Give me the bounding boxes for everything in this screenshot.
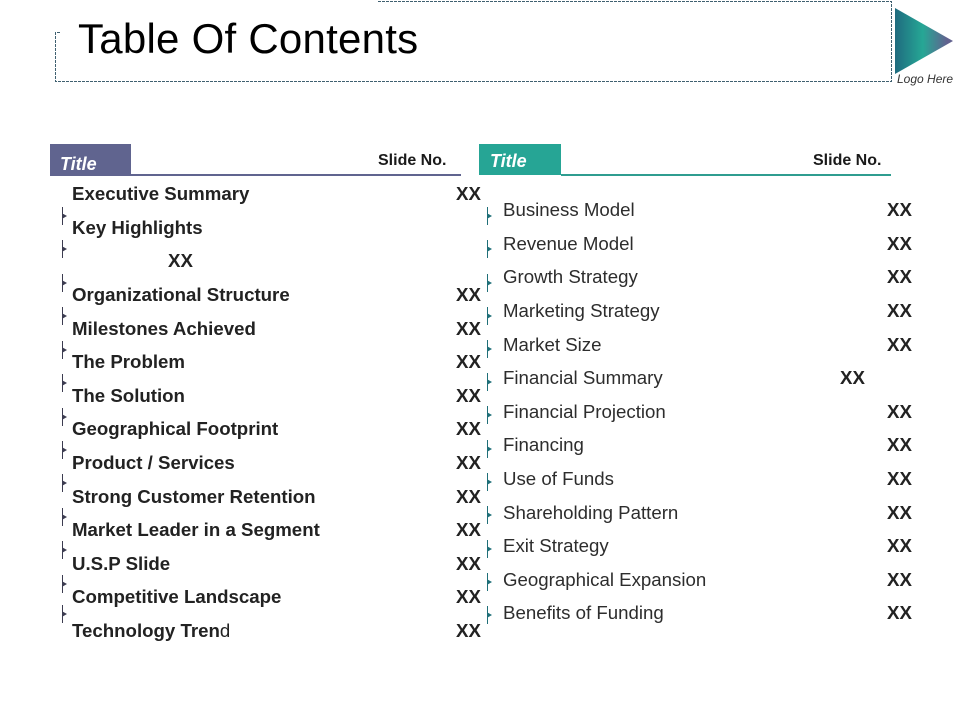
right list tick markers [488,207,491,624]
right list labels: Exit Strategy [503,535,609,556]
left list tick markers [62,207,66,623]
right list slide numbers: XX [887,233,912,254]
left list slide numbers: XX [456,284,481,305]
right list labels: Growth Strategy [503,266,638,287]
left list labels: The Solution [72,385,185,406]
right list labels: Shareholding Pattern [503,502,678,523]
right header title: Title [490,151,527,171]
left list slide numbers: XX [456,351,481,372]
right list labels: Revenue Model [503,233,634,254]
right list labels: Market Size [503,334,602,355]
right list slide numbers: XX [887,434,912,455]
right list slide numbers: XX [887,602,912,623]
right list slide numbers: XX [887,334,912,355]
panel: right contents [479,144,912,624]
right list slide numbers: XX [840,367,865,388]
icon: logo triangle [895,8,953,74]
right list slide numbers: XX [887,401,912,422]
right list slide numbers: XX [887,502,912,523]
left list labels: Executive Summary [72,183,250,204]
right list labels: Benefits of Funding [503,602,664,623]
left list labels: U.S.P Slide [72,553,170,574]
right list slide numbers: XX [887,300,912,321]
left list slide numbers: XX [456,183,481,204]
left list labels: Competitive Landscape [72,586,281,607]
left list labels: Key Highlights [72,217,203,238]
right list slide numbers: XX [887,569,912,590]
right list labels [503,199,706,623]
left list slide numbers: XX [168,250,193,271]
left list slide numbers: XX [456,586,481,607]
right list labels: Geographical Expansion [503,569,706,590]
right list labels: Marketing Strategy [503,300,660,321]
right header tab [479,144,561,175]
left list labels: Milestones Achieved [72,318,256,339]
right list slide numbers [840,199,912,623]
left list labels [72,183,320,641]
right list labels: Financial Projection [503,401,666,422]
left list slide numbers: XX [456,620,481,641]
left list slide numbers: XX [456,318,481,339]
panel: left contents [50,144,481,641]
right list labels: Business Model [503,199,635,220]
left list labels: Market Leader in a Segment [72,519,320,540]
left list labels: Strong Customer Retention [72,486,316,507]
left list slide numbers: XX [456,486,481,507]
left list slide numbers: XX [456,452,481,473]
left header slide number label: Slide No. [378,152,446,169]
left list slide numbers [168,183,481,641]
left list slide numbers: XX [456,519,481,540]
right list slide numbers: XX [887,266,912,287]
left list labels: Technology Trend [72,620,230,641]
right list labels: Financing [503,434,584,455]
left list slide numbers: XX [456,385,481,406]
left header tab [50,144,131,176]
right list slide numbers: XX [887,535,912,556]
left list labels: The Problem [72,351,185,372]
right list slide numbers: XX [887,468,912,489]
logo caption: Logo Here [897,72,953,86]
left list labels: Geographical Footprint [72,418,278,439]
right header slide number label: Slide No. [813,152,881,169]
right list slide numbers: XX [887,199,912,220]
left list slide numbers: XX [456,553,481,574]
left list slide numbers: XX [456,418,481,439]
left header rule [131,174,461,176]
right list labels: Financial Summary [503,367,663,388]
left header title: Title [60,154,97,174]
right list labels: Use of Funds [503,468,614,489]
left list labels: Product / Services [72,452,235,473]
right header rule [561,174,891,176]
left list labels: Organizational Structure [72,284,290,305]
title: Table Of Contents [78,15,418,62]
